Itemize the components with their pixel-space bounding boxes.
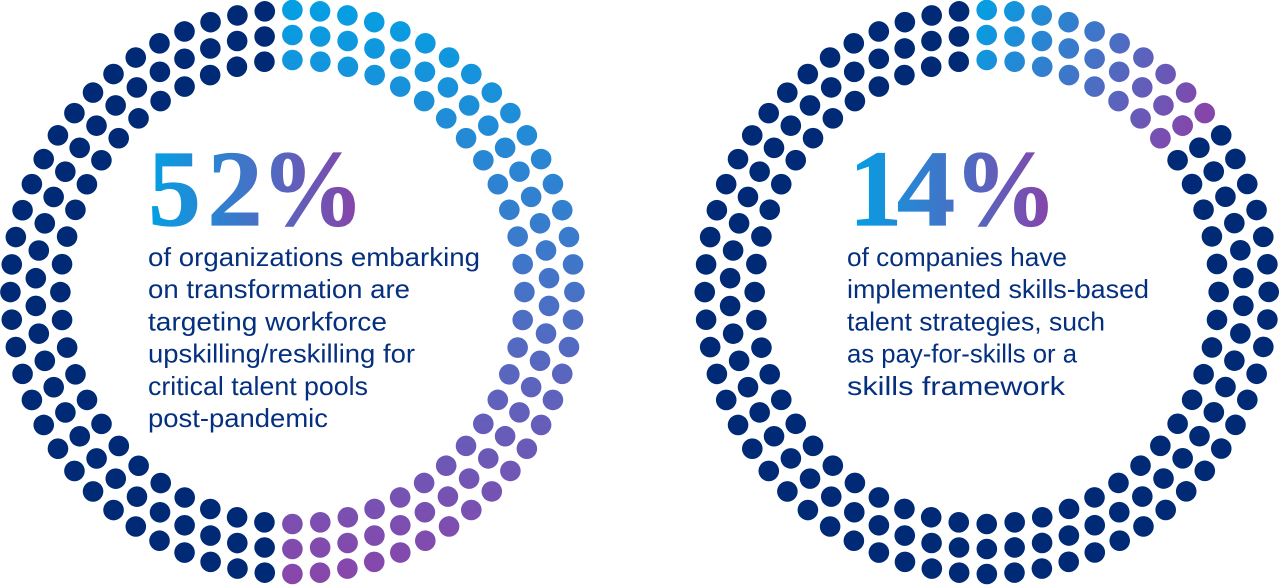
heading: 52% — [148, 130, 364, 249]
text block: 14% description: of companies have — [847, 242, 1067, 272]
text block: 14% description — [847, 242, 1149, 401]
heading: 14% — [849, 130, 1057, 249]
text block: 14% description: as pay-for-skills or a — [847, 339, 1078, 369]
heading: 52%: % — [261, 130, 364, 249]
dot ring: 52% highlighted gradient portion — [282, 10, 574, 584]
panel: 52% statistic — [10, 10, 574, 584]
heading: 14%: % — [954, 130, 1057, 249]
panel: 14% statistic — [705, 10, 1269, 574]
text block: 52% description — [148, 242, 480, 433]
heading: 14%: 4 — [897, 130, 955, 249]
heading: 52%: 2 — [208, 130, 262, 249]
text block: 52% description: on transformation are — [148, 274, 410, 304]
heading: 52%: 5 — [148, 130, 200, 249]
heading: 14%: 1 — [849, 130, 902, 249]
text block: 14% description: implemented skills-based — [847, 274, 1149, 304]
dot ring: 14% navy portion — [705, 11, 1269, 574]
text block: 52% description: post-pandemic — [148, 403, 328, 433]
text block: 52% description: of organizations embarking — [148, 242, 480, 272]
text block: 52% description: upskilling/reskilling for — [148, 339, 415, 369]
text block: 52% description: critical talent pools — [148, 371, 368, 401]
text block: 14% description: talent strategies, such — [847, 306, 1105, 336]
dot ring: 14% highlighted gradient portion — [987, 10, 1215, 148]
dot ring: 52% navy portion — [10, 11, 275, 583]
text block: 14% description: skills framework — [847, 371, 1066, 401]
text block: 52% description: targeting workforce — [148, 306, 387, 336]
